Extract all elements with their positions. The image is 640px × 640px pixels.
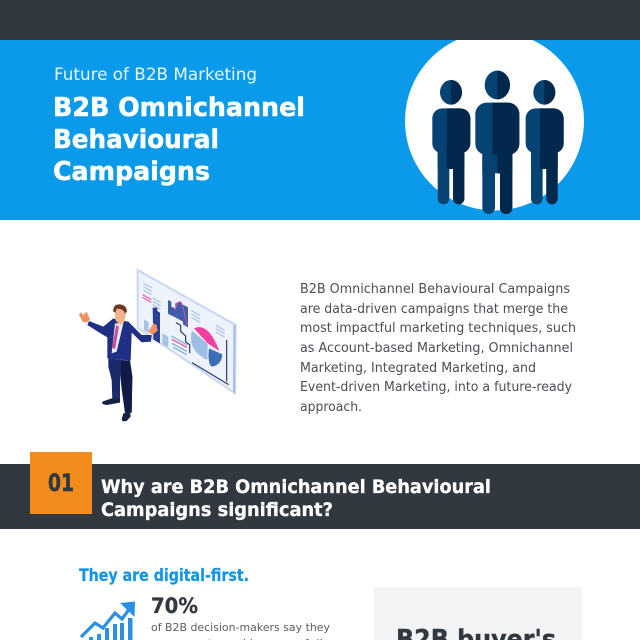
top dark bar: [0, 0, 640, 40]
section number badge: [30, 452, 92, 514]
intro paragraph: approach.: [300, 400, 362, 415]
panel: B2B buyer's card: [374, 587, 582, 640]
stat: 70 percent: 70%: [151, 594, 198, 619]
intro paragraph: Event-driven Marketing, into a future-ready: [300, 380, 572, 395]
hero title: Behavioural: [53, 125, 219, 155]
illustration: presenter with data board: [79, 270, 236, 421]
intro paragraph: Marketing, Integrated Marketing, and: [300, 361, 536, 376]
intro paragraph: [300, 282, 576, 415]
intro paragraph: most impactful marketing techniques, such: [300, 321, 576, 336]
intro paragraph: B2B Omnichannel Behavioural Campaigns: [300, 282, 570, 297]
eyebrow: future of B2B marketing: Future of B2B Marketing: [54, 65, 257, 85]
hero title: B2B Omnichannel: [53, 93, 305, 123]
stat description: of B2B decision-makers say they: [151, 621, 330, 634]
intro paragraph: are data-driven campaigns that merge the: [300, 302, 568, 317]
stat: 70 percent: [151, 594, 331, 640]
section number badge: 01: [48, 469, 74, 497]
hero title: Campaigns: [53, 157, 210, 187]
section heading: Why are B2B Omnichannel Behavioural: [101, 476, 491, 498]
panel: hero banner: [0, 32, 640, 220]
subheading: they are digital-first: They are digital-first.: [79, 566, 249, 585]
icon: rising bar chart with arrow: [81, 602, 135, 640]
section header band 01: [0, 452, 640, 529]
section heading: Campaigns significant?: [101, 499, 333, 521]
intro paragraph: as Account-based Marketing, Omnichannel: [300, 341, 573, 356]
stat description: [151, 621, 331, 640]
icon: white circle with three people: [405, 32, 584, 214]
hero title: [53, 93, 305, 187]
figure: presenter: [79, 304, 158, 421]
section heading: [101, 476, 491, 521]
